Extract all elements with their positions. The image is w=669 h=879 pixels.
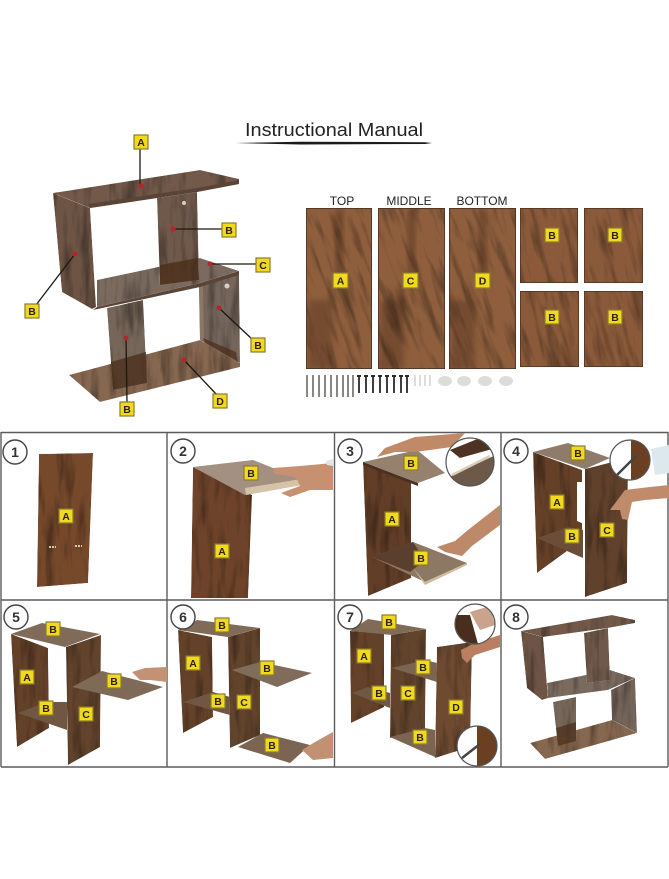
badge C	[256, 258, 270, 272]
badge B: B	[110, 676, 118, 688]
inset ring	[455, 604, 495, 644]
number 8: 8	[512, 609, 520, 625]
board C	[390, 629, 426, 738]
badge C: C	[240, 697, 248, 709]
badge B	[222, 223, 236, 237]
badge D: D	[452, 702, 460, 714]
board A	[350, 631, 384, 723]
sleeve	[326, 459, 333, 466]
step 6	[171, 605, 333, 763]
long grey screws	[307, 375, 353, 397]
step 2	[171, 439, 333, 598]
panel B, upper right	[584, 208, 643, 283]
lower shelf B	[238, 733, 310, 763]
board A	[178, 630, 213, 733]
top board	[521, 615, 635, 637]
title: Instructional Manual: Instructional Manual	[245, 119, 423, 140]
top board B	[533, 443, 610, 469]
callout lines and dots	[36, 147, 257, 403]
badge B: B	[548, 312, 556, 324]
badge C	[600, 523, 614, 537]
badge B: B	[574, 448, 582, 460]
number 6	[171, 605, 195, 629]
board A	[363, 462, 411, 596]
top board B	[350, 619, 426, 635]
number 7: 7	[346, 609, 354, 625]
panel B, lower left	[520, 291, 579, 367]
badge B	[46, 622, 60, 636]
number 5: 5	[12, 609, 20, 625]
shelf: middle board C	[97, 258, 239, 307]
upper right shelf B	[232, 662, 312, 687]
label MIDDLE: MIDDLE	[386, 194, 432, 208]
number 4	[504, 439, 528, 463]
number 4: 4	[512, 443, 520, 459]
badge C	[403, 273, 418, 288]
shelf: upper inner panel B	[157, 192, 199, 285]
badge B	[120, 402, 134, 416]
board A	[191, 467, 252, 598]
number 2	[171, 439, 195, 463]
arm pressing top	[377, 433, 465, 457]
assembled shelf diagram	[25, 135, 270, 416]
board A	[533, 452, 582, 573]
badge D	[213, 394, 227, 408]
badge B: B	[225, 225, 233, 237]
hand	[302, 732, 333, 760]
gap	[577, 482, 584, 524]
badge B: B	[254, 340, 262, 352]
badge D	[475, 273, 490, 288]
panel B, lower right	[584, 291, 643, 367]
badge C: C	[603, 525, 611, 537]
upper right shelf	[392, 660, 437, 682]
board D	[435, 642, 472, 758]
number 3	[338, 439, 362, 463]
step 8: finished shelf	[504, 605, 637, 759]
badge B: B	[123, 404, 131, 416]
badge B	[413, 730, 427, 744]
badge B	[39, 701, 53, 715]
step 4	[504, 439, 669, 597]
inner upper panel	[584, 628, 610, 683]
badge B: B	[268, 740, 276, 752]
number 2: 2	[179, 443, 187, 459]
badge A: A	[62, 511, 70, 523]
bottom board B	[372, 542, 467, 582]
badge B: B	[42, 703, 50, 715]
badge A	[333, 273, 348, 288]
badge B	[545, 310, 559, 324]
lower right panel	[611, 678, 637, 733]
badge B	[571, 446, 585, 460]
middle shelf	[547, 670, 635, 698]
badge B	[25, 304, 39, 318]
detail inset	[610, 440, 651, 480]
badge B: B	[247, 468, 255, 480]
number 5	[4, 605, 28, 629]
badge C: C	[404, 688, 412, 700]
badge C: C	[82, 709, 90, 721]
parts layout	[306, 196, 643, 397]
badge A	[550, 495, 564, 509]
detail inset	[450, 440, 494, 486]
plastic feet	[438, 376, 513, 386]
badge D: D	[479, 276, 487, 288]
shelf: top board A	[53, 170, 239, 208]
badge A: A	[189, 658, 197, 670]
inner shelf	[537, 527, 583, 558]
board B	[193, 460, 308, 495]
badge D	[449, 700, 463, 714]
badge B: B	[419, 662, 427, 674]
board C	[585, 458, 628, 597]
short black screws	[357, 376, 409, 393]
badge B	[265, 738, 279, 752]
steps grid frame	[1, 432, 668, 767]
badge B	[565, 529, 579, 543]
left inner shelf	[352, 687, 390, 708]
top board B	[11, 623, 100, 647]
badge B	[608, 310, 622, 324]
board C	[228, 628, 260, 748]
board C	[66, 635, 101, 765]
sleeve	[651, 445, 669, 475]
top board B	[178, 620, 260, 637]
step 1	[3, 440, 93, 587]
badge B	[545, 228, 559, 242]
shelf: lower left side panel B	[107, 300, 147, 390]
panel C	[378, 208, 445, 369]
badge A: A	[218, 546, 226, 558]
number 1: 1	[11, 444, 19, 460]
badge B	[404, 456, 418, 470]
badge B	[211, 694, 225, 708]
badge B	[251, 338, 265, 352]
label BOTTOM: BOTTOM	[456, 194, 508, 208]
step 7	[338, 604, 500, 766]
badge A	[357, 649, 371, 663]
inset ring	[457, 726, 497, 766]
badge A	[385, 512, 399, 526]
screw holes	[182, 201, 230, 288]
badge A	[215, 544, 229, 558]
inset ring	[610, 440, 650, 480]
panel A	[306, 208, 372, 369]
badge B	[414, 551, 428, 565]
number 1	[3, 440, 27, 464]
badge B: B	[611, 312, 619, 324]
board A	[37, 453, 93, 587]
panel D	[449, 208, 516, 369]
pegs	[49, 546, 82, 547]
bottom board	[530, 720, 637, 759]
badge C: C	[407, 276, 415, 288]
right shelf B	[72, 671, 163, 700]
lower left panel	[553, 697, 576, 740]
badge A: A	[23, 672, 31, 684]
inner shelf	[183, 692, 230, 715]
badge B: B	[49, 624, 57, 636]
badge B: B	[407, 458, 415, 470]
badge B: B	[218, 620, 226, 632]
badge A: A	[337, 276, 345, 288]
shelf: bottom board D	[69, 340, 240, 402]
badge B	[608, 228, 622, 242]
badge B	[260, 661, 274, 675]
detail inset top	[456, 608, 494, 644]
panel B, upper left	[520, 208, 578, 283]
badge B	[215, 618, 229, 632]
badge C	[401, 686, 415, 700]
inset ring	[446, 438, 494, 486]
hand	[273, 463, 333, 497]
shelf: lower right side panel B	[199, 272, 240, 363]
badge C	[237, 695, 251, 709]
badge B: B	[214, 696, 222, 708]
number 3: 3	[346, 443, 354, 459]
arm	[610, 485, 669, 520]
lower inner shelf	[18, 702, 67, 730]
badge C	[79, 707, 93, 721]
badge A: A	[553, 497, 561, 509]
badge A: A	[137, 137, 145, 149]
badge B: B	[611, 230, 619, 242]
badge B: B	[385, 617, 393, 629]
step 3	[338, 433, 500, 596]
badge B: B	[28, 306, 36, 318]
badge B: B	[417, 553, 425, 565]
label TOP: TOP	[330, 194, 354, 208]
badge C: C	[259, 260, 267, 272]
badge B	[382, 615, 396, 629]
hand	[132, 667, 167, 682]
small pins	[415, 375, 430, 386]
lower shelf	[390, 728, 435, 757]
badge A	[20, 670, 34, 684]
badge B: B	[568, 531, 576, 543]
step 5	[4, 605, 167, 765]
number 8	[504, 605, 528, 629]
badge A: A	[360, 651, 368, 663]
badge A	[186, 656, 200, 670]
badge B: B	[416, 732, 424, 744]
shelf: upper left panel B	[53, 193, 96, 309]
top board B	[363, 450, 445, 483]
badge B	[244, 466, 258, 480]
badge D: D	[216, 396, 224, 408]
badge B: B	[375, 688, 383, 700]
badge A	[134, 135, 148, 149]
board A	[11, 634, 49, 747]
badge B: B	[548, 230, 556, 242]
badge B	[416, 660, 430, 674]
detail inset bottom	[457, 726, 497, 766]
hand	[461, 635, 500, 663]
badge B: B	[263, 663, 271, 675]
badge B	[107, 674, 121, 688]
arm holding bottom	[437, 505, 500, 556]
number 6: 6	[179, 609, 187, 625]
number 7	[338, 605, 362, 629]
badge B	[372, 686, 386, 700]
left upper panel	[521, 631, 548, 700]
badge A	[59, 509, 73, 523]
badge A: A	[388, 514, 396, 526]
